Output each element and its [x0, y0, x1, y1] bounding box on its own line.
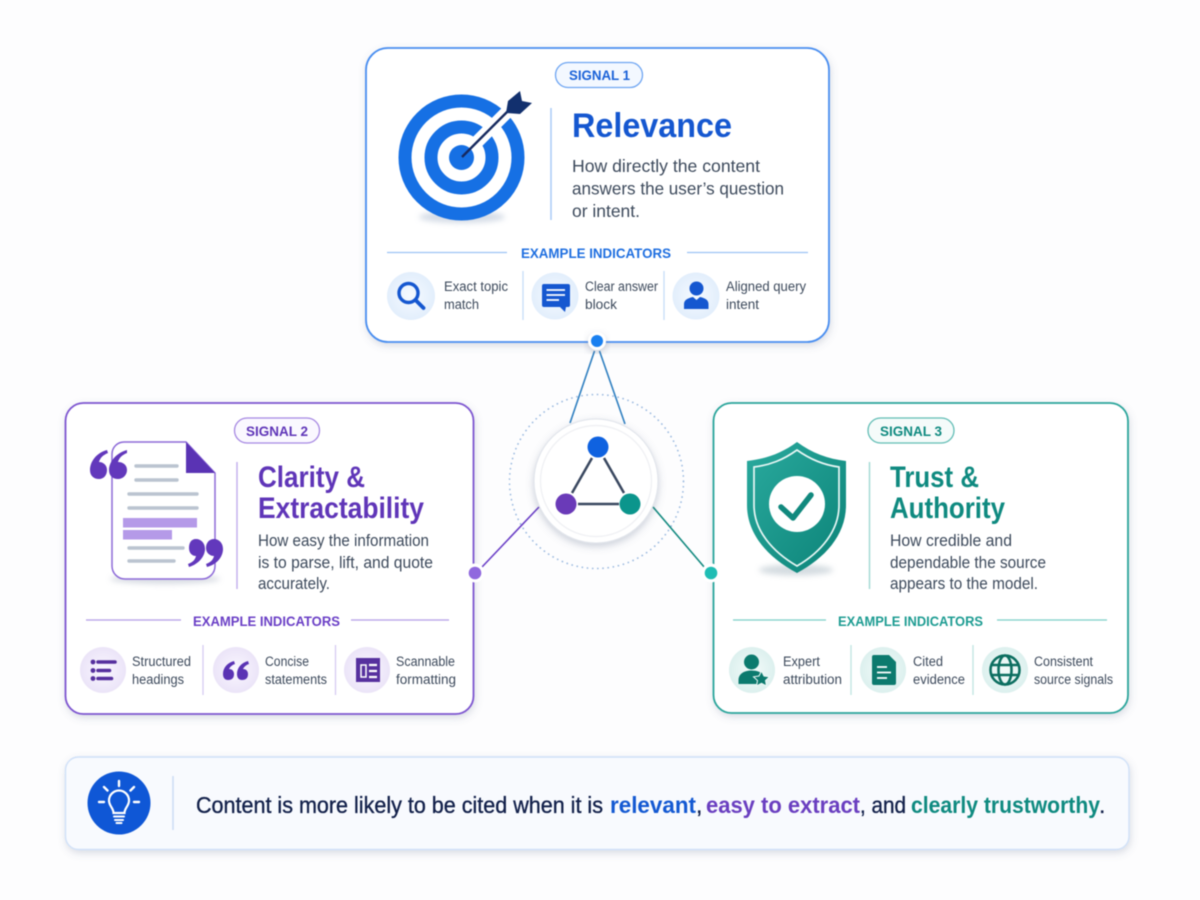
heading: trust and authority: Authority [890, 492, 1005, 525]
indicator: concise statements: Concise [265, 654, 309, 669]
description [572, 156, 784, 221]
badge: signal 3 [868, 418, 954, 443]
hub triangle network [556, 436, 640, 514]
connector node: purple [466, 564, 484, 582]
indicator: concise statements [203, 645, 327, 695]
hub disc [534, 419, 658, 543]
takeaway banner [66, 757, 1129, 850]
indicator: consistent source signals: Consistent [1034, 654, 1093, 669]
takeaway statement: clearly trustworthy [911, 792, 1100, 818]
indicator: expert attribution [729, 647, 842, 693]
divider [172, 776, 174, 830]
indicator: expert attribution: attribution [783, 672, 842, 687]
indicator: clear answer block: block [585, 297, 617, 312]
connector: right [653, 507, 705, 568]
dotted orbit [510, 394, 684, 568]
description [890, 532, 1046, 593]
card frame: clarity [66, 403, 474, 714]
subheading: example indicators: EXAMPLE INDICATORS [521, 246, 671, 261]
icon: target with arrow [405, 91, 532, 223]
heading: relevance: Relevance [572, 107, 732, 145]
description: answers the user’s question [572, 178, 784, 198]
takeaway statement: , and [860, 792, 906, 818]
indicator: scannable formatting [336, 645, 456, 695]
badge: signal 1: SIGNAL 1 [569, 67, 630, 83]
heading: clarity and extractability: Extractability [258, 492, 424, 525]
panel: signal 1 relevance [366, 48, 829, 342]
indicator: consistent source signals [973, 645, 1113, 695]
indicator: aligned query intent: Aligned query [726, 279, 806, 294]
indicator: cited evidence [851, 645, 965, 695]
description: is to parse, lift, and quote [258, 554, 433, 572]
divider [868, 462, 870, 589]
divider [550, 108, 552, 220]
takeaway statement: , [696, 792, 702, 818]
heading: clarity and extractability: Clarity & [258, 461, 365, 494]
description: appears to the model. [890, 575, 1038, 593]
panel: signal 2 clarity and extractability [66, 403, 474, 714]
icon: shield with check [747, 442, 846, 576]
indicator: exact topic match [387, 272, 508, 320]
card frame: relevance [366, 48, 829, 342]
description: How credible and [890, 532, 1012, 550]
indicator: scannable formatting: formatting [396, 672, 456, 687]
takeaway statement: Content is more likely to be cited when it is [196, 792, 603, 818]
indicator: structured headings: Structured [132, 654, 191, 669]
heading: clarity and extractability [258, 461, 424, 525]
indicator: concise statements: statements [265, 672, 327, 687]
description [258, 532, 433, 593]
badge: signal 2 [234, 418, 320, 443]
card frame: trust [714, 403, 1128, 713]
center hub with connectors [466, 332, 720, 582]
indicator: exact topic match: Exact topic [444, 279, 508, 294]
description: How directly the content [572, 156, 760, 176]
takeaway statement: . [1099, 792, 1105, 818]
badge: signal 2: SIGNAL 2 [246, 423, 308, 439]
panel: signal 3 trust and authority [714, 403, 1128, 713]
connector node: teal [702, 564, 720, 582]
takeaway statement: easy to extract [706, 792, 860, 818]
indicator: clear answer block [523, 271, 658, 320]
takeaway statement [196, 792, 1105, 818]
heading: trust and authority [890, 461, 1005, 525]
indicator: structured headings: headings [132, 672, 184, 687]
connector: left [482, 507, 539, 567]
indicator: consistent source signals: source signals [1034, 672, 1113, 687]
heading: trust and authority: Trust & [890, 461, 979, 494]
description: How easy the information [258, 532, 429, 550]
subheading: example indicators: EXAMPLE INDICATORS [838, 614, 983, 629]
indicator: aligned query intent: intent [726, 297, 759, 312]
takeaway statement: relevant [610, 792, 696, 818]
connector node: blue [588, 332, 606, 350]
description: dependable the source [890, 554, 1046, 572]
subheading: example indicators: EXAMPLE INDICATORS [193, 614, 340, 629]
icon: document with quotes [90, 442, 223, 584]
indicator: scannable formatting: Scannable [396, 654, 455, 669]
icon: light bulb [88, 772, 150, 834]
indicator: aligned query intent [664, 271, 806, 320]
badge: signal 3: SIGNAL 3 [880, 423, 942, 439]
indicator: structured headings [80, 647, 191, 693]
indicator: cited evidence: evidence [913, 672, 965, 687]
banner frame [66, 757, 1129, 850]
indicator: exact topic match: match [444, 297, 479, 312]
connector: top [570, 351, 625, 424]
description: or intent. [572, 201, 640, 221]
badge: signal 1 [556, 62, 642, 88]
indicator: cited evidence: Cited [913, 654, 943, 669]
indicator: clear answer block: Clear answer [585, 279, 658, 294]
divider [236, 462, 238, 589]
indicator: expert attribution: Expert [783, 654, 820, 669]
description: accurately. [258, 575, 330, 593]
